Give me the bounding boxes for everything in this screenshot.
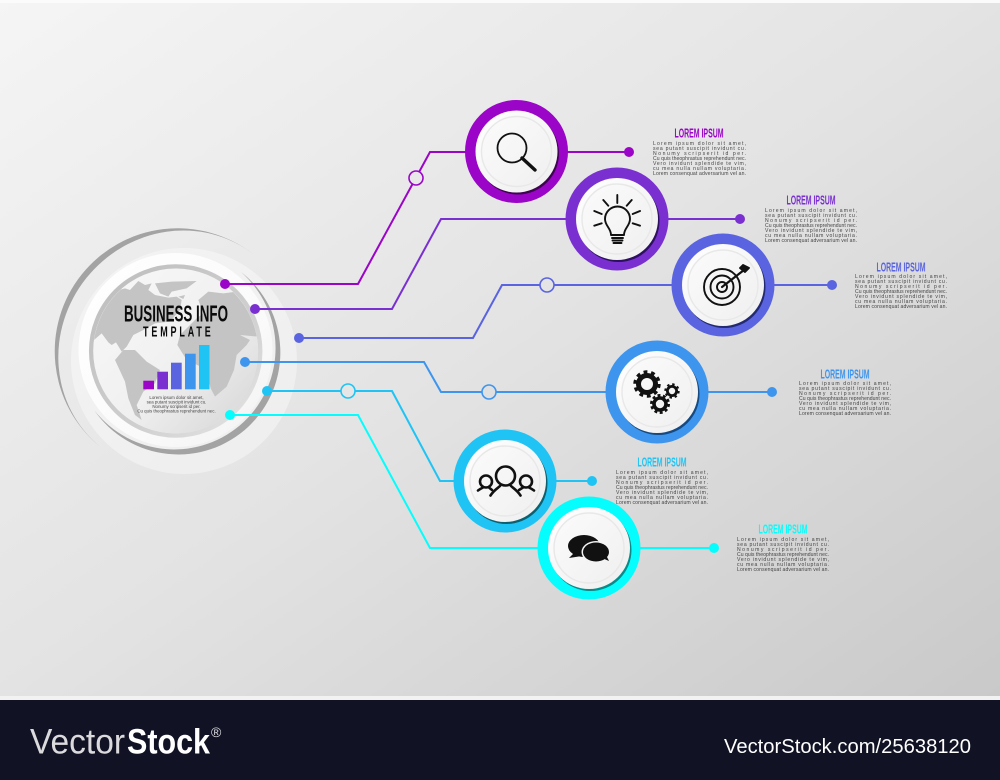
text block 6: Lorem consenquat adversarium vel an. [737,567,829,573]
grey arc left [55,228,253,446]
text block 5: Vero invidunt splendide te vim, [616,490,708,496]
text block 4 [799,366,891,417]
text block 1: Cu quis theophrastus reprehendunt nec. [653,156,746,162]
text block 3: LOREM IPSUM [876,259,926,274]
icon: target with arrow [704,265,749,305]
emblem caption: Cu quis theophrastus reprehendunt nec. [137,408,216,413]
text block 4: Lorem ipsum dolor sit amet, [799,381,891,387]
step 4 badge [606,340,708,444]
text block 1: Nonumy scripserit id per. [653,151,746,157]
text block 1 [653,126,746,177]
text block 3: Vero invidunt splendide te vim, [855,294,947,300]
text block 3 [855,259,947,310]
step 5 badge [454,430,556,532]
text block 4: sea putant suscipit invidunt cu. [799,386,891,392]
emblem caption [137,395,216,413]
text block 3: Lorem consenquat adversarium vel an. [855,304,947,310]
text block 5: Lorem ipsum dolor sit amet, [616,470,708,476]
footer logo: Vector [30,722,125,762]
icon: people [478,466,534,496]
text block 6: Cu quis theophrastus reprehendunt nec. [737,552,829,558]
text block 5: cu mea nulla nullam voluptaria. [616,495,708,501]
top strip [0,0,1000,3]
emblem caption: sea putant suscipit invidunt cu. [147,400,206,404]
text block 6: LOREM IPSUM [758,522,808,536]
step 6 badge [538,496,640,600]
emblem caption: Nonumy scripserit id per. [152,404,201,409]
footer id: VectorStock.com/25638120 [724,736,971,758]
connector 6 [225,410,719,553]
text block 5: Nonumy scripserit id per. [616,480,708,486]
text block 5 [616,454,708,506]
white ring [78,253,272,447]
footer logo: Stock [127,722,210,762]
connector 4 [240,357,777,399]
step 1 badge [465,100,568,203]
footer logo [30,722,222,762]
text block 5: Lorem consenquat adversarium vel an. [616,500,708,506]
text block 4: LOREM IPSUM [820,366,870,381]
text block 2: Nonumy scripserit id per. [765,218,857,224]
text block 5: Cu quis theophrastus reprehendunt nec. [616,485,708,491]
text block 1: Vero invidunt splendide te vim, [653,161,746,167]
white strip [0,696,1000,700]
text block 3: Cu quis theophrastus reprehendunt nec. [855,289,947,295]
step 3 badge [672,234,774,336]
text block 3: sea putant suscipit invidunt cu. [855,279,947,285]
text block 2: Cu quis theophrastus reprehendunt nec. [765,223,857,229]
globe disc [93,268,258,434]
title: BUSINESS INFO [124,300,228,326]
footer logo: ® [211,724,222,740]
central globe emblem [55,228,297,474]
text block 2: Lorem ipsum dolor sit amet, [765,208,857,214]
icon: magnifier [498,134,535,170]
text block 2: Vero invidunt splendide te vim, [765,228,857,234]
text block 5: sea putant suscipit invidunt cu. [616,475,708,481]
text block 5: LOREM IPSUM [638,454,686,470]
world map [90,281,258,420]
text block 6 [737,522,829,573]
text block 2: Lorem consenquat adversarium vel an. [765,238,857,244]
text block 4: Nonumy scripserit id per. [799,391,891,397]
text block 1: sea putant suscipit invidunt cu. [653,146,746,152]
connector 2 [250,214,745,314]
subtitle: TEMPLATE [143,323,211,340]
step 2 badge [566,168,668,270]
text block 1: Lorem consenquat adversarium vel an. [653,171,746,177]
connector 5 [262,384,597,486]
text block 4: Lorem consenquat adversarium vel an. [799,411,891,417]
icon: gears [635,372,679,413]
text block 4: cu mea nulla nullam voluptaria. [799,406,891,412]
text block 6: Vero invidunt splendide te vim, [737,557,829,563]
text block 3: cu mea nulla nullam voluptaria. [855,299,947,305]
text block 3: Lorem ipsum dolor sit amet, [855,274,947,280]
icon: light bulb [594,195,640,243]
connector 1 [220,147,634,289]
emblem caption: Lorem ipsum dolor sit amet, [149,395,204,400]
text block 2: sea putant suscipit invidunt cu. [765,213,857,219]
icon: speech bubbles [568,535,610,563]
text block 4: Vero invidunt splendide te vim, [799,401,891,407]
text block 6: cu mea nulla nullam voluptaria. [737,562,829,568]
text block 3: Nonumy scripserit id per. [855,284,947,290]
text block 1: cu mea nulla nullam voluptaria. [653,166,746,172]
bar chart [143,345,210,389]
connector 3 [294,278,837,343]
text block 6: sea putant suscipit invidunt cu. [737,542,829,548]
outer translucent disc [71,248,297,474]
footer banner [0,700,1000,780]
text block 2: cu mea nulla nullam voluptaria. [765,233,857,239]
text block 4: Cu quis theophrastus reprehendunt nec. [799,396,891,402]
text block 6: Nonumy scripserit id per. [737,547,829,553]
globe rim [91,266,260,436]
grey arc right [94,272,280,454]
text block 1: Lorem ipsum dolor sit amet, [653,141,746,147]
text block 1: LOREM IPSUM [674,126,724,141]
text block 6: Lorem ipsum dolor sit amet, [737,537,829,543]
text block 2 [765,193,857,244]
text block 2: LOREM IPSUM [786,193,836,208]
